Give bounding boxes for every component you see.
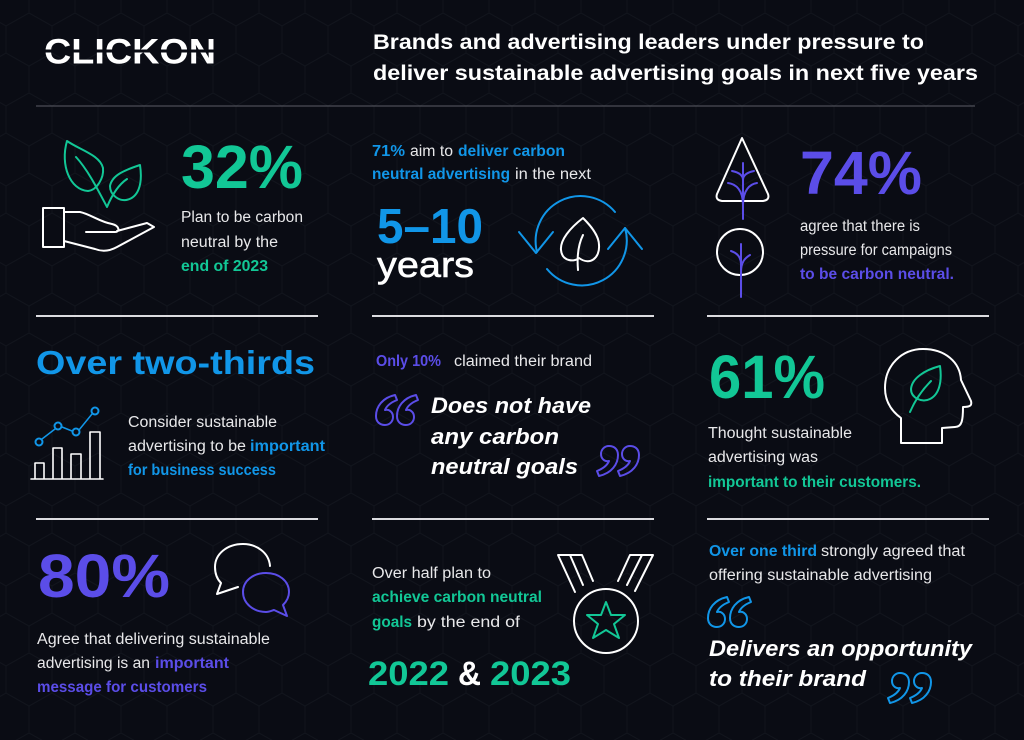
panel: over half <box>368 555 653 693</box>
text: 71% aim to deliver: in the next <box>515 166 592 183</box>
text: agree delivering: message for customers <box>37 679 207 696</box>
title: deliver sustainable advertising goals in next five years <box>373 61 978 85</box>
text: only 10% <box>376 353 592 370</box>
icon: closing quote <box>597 446 639 476</box>
text: 71% aim to deliver: deliver carbon <box>458 143 565 160</box>
text: over half plan: achieve carbon neutral <box>372 589 542 606</box>
stat: 5-10 years: years <box>377 244 474 285</box>
stat: 5-10 years: 5–10 <box>377 200 483 254</box>
stat: 2022 & 2023: 2023 <box>490 655 571 693</box>
stat: 2022 & 2023: & <box>458 655 481 693</box>
text: thought sustainable: Thought sustainable <box>708 425 852 442</box>
text: consider sustainable: Consider sustainable <box>128 414 277 431</box>
text: agree delivering: advertising is an <box>37 655 150 672</box>
stat: 2022 & 2023 <box>368 655 571 693</box>
text: over half plan <box>372 565 542 631</box>
icon: recycle arrows with leaf <box>519 196 642 285</box>
stat: 2022 & 2023: 2022 <box>368 655 449 693</box>
stat: 80%: 80% <box>38 542 170 610</box>
text: consider sustainable: advertising to be <box>128 438 246 455</box>
stat: 32%: 32% <box>181 133 303 201</box>
panel: over one third <box>708 543 974 703</box>
quote: does not have any carbon neutral goals <box>431 393 591 479</box>
text: 71% aim to deliver <box>372 143 592 183</box>
panel: 32% carbon neutral <box>43 133 303 275</box>
text: consider sustainable: important <box>250 438 325 455</box>
quote: delivers an opportunity <box>709 636 974 691</box>
text: thought sustainable: advertising was <box>708 449 818 466</box>
stat: 61%: 61% <box>709 343 825 411</box>
text: plan to be carbon neutral <box>181 209 303 275</box>
icon: hand with leaves <box>43 141 154 251</box>
title <box>373 30 978 85</box>
icon: opening quote <box>708 597 751 627</box>
quote: delivers an opportunity: to their brand <box>709 666 867 691</box>
panel: only 10% quote <box>376 353 639 479</box>
icon: head with leaf <box>885 349 971 443</box>
text: 71% aim to deliver: 71% <box>372 143 405 160</box>
text: agree pressure <box>800 218 954 283</box>
panel: 74% pressure <box>717 138 954 297</box>
quote: delivers an opportunity: Delivers an opportunity <box>709 636 974 661</box>
heading: over two-thirds: Over two-thirds <box>36 344 315 381</box>
panel: 61% <box>708 343 971 491</box>
icon: opening quote <box>376 395 418 425</box>
text: plan to be carbon neutral: Plan to be carbon <box>181 209 303 226</box>
text: agree delivering: Agree that delivering sustainable <box>37 631 270 648</box>
quote: does not have any carbon neutral goals: neutral goals <box>431 454 578 479</box>
text: consider sustainable <box>128 414 325 479</box>
text: agree delivering: important <box>155 655 229 672</box>
text: agree delivering <box>37 631 270 696</box>
quote: does not have any carbon neutral goals: Does not have <box>431 393 591 418</box>
text: agree pressure: agree that there is <box>800 218 920 235</box>
icon: medal with star <box>558 555 653 653</box>
panel: over two-thirds <box>31 344 325 479</box>
text: consider sustainable: for business success <box>128 462 276 479</box>
icon: speech bubbles <box>215 544 289 616</box>
text: thought sustainable: important to their customers. <box>708 474 921 491</box>
text: over half plan: by the end of <box>417 614 521 631</box>
text: agree pressure: pressure for campaigns <box>800 242 952 259</box>
text: over half plan: goals <box>372 614 412 631</box>
text: 71% aim to deliver: aim to <box>410 143 453 160</box>
text: agree pressure: to be carbon neutral. <box>800 266 954 283</box>
text: over one third: offering sustainable advertising <box>709 567 932 584</box>
panel: 80% <box>37 542 289 696</box>
text: over one third <box>709 543 966 584</box>
icon: bar chart with trend line <box>31 408 103 479</box>
stat: 5-10 years <box>377 200 483 285</box>
stat: 74%: 74% <box>800 139 922 207</box>
text: only 10%: Only 10% <box>376 353 441 370</box>
quote: does not have any carbon neutral goals: any carbon <box>431 424 559 449</box>
text: over one third: strongly agreed that <box>821 543 966 560</box>
text: over half plan: Over half plan to <box>372 565 491 582</box>
text: plan to be carbon neutral: neutral by the <box>181 234 278 251</box>
icon: trees <box>717 138 768 297</box>
logo: CLICKON: CLICKON <box>44 32 216 72</box>
text: over one third: Over one third <box>709 543 817 560</box>
text: plan to be carbon neutral: end of 2023 <box>181 258 268 275</box>
icon: closing quote <box>888 673 931 703</box>
text: 71% aim to deliver: neutral advertising <box>372 166 510 183</box>
text: thought sustainable <box>708 425 921 491</box>
panel: 71% in 5-10 years <box>372 143 642 285</box>
text: only 10%: claimed their brand <box>454 353 592 370</box>
title: Brands and advertising leaders under pressure to <box>373 30 924 54</box>
